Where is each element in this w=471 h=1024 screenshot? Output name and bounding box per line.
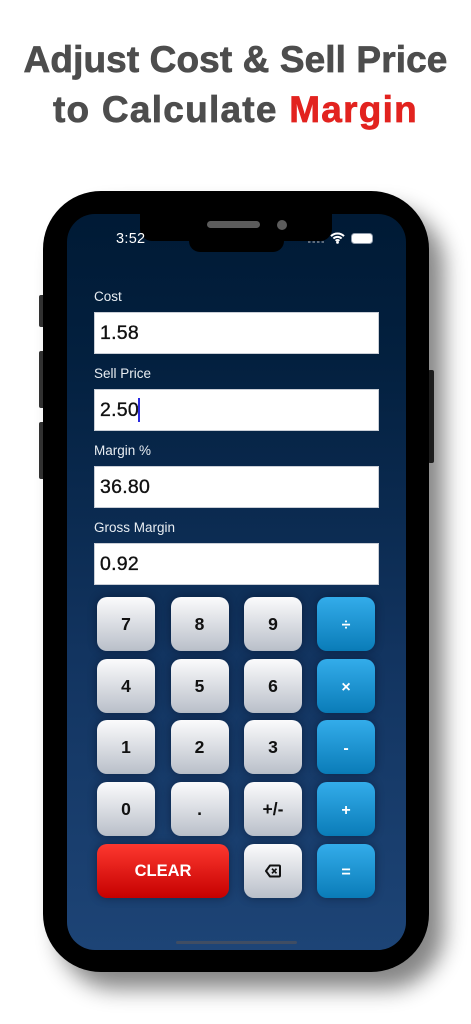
camera [277,220,287,230]
key clear [97,844,229,898]
label: gross margin: Gross Margin [94,520,175,535]
key 0: 0 [121,799,131,819]
key divide [317,597,375,651]
side button: mute [39,295,45,327]
key 7: 7 [121,614,131,634]
side button: volume down [39,422,45,479]
home indicator [176,941,297,944]
key plus [317,782,375,836]
key 7 [97,597,155,651]
key 4: 4 [121,676,131,696]
field: sell price: 2.50 [100,399,139,421]
status bar: time: 3:52 [116,231,145,247]
key 3: 3 [268,737,278,757]
key decimal: . [197,799,202,819]
key multiply: × [341,679,351,696]
phone screen [67,214,406,950]
key plus: + [341,802,351,819]
field: sell price [94,389,379,431]
key 1: 1 [121,737,131,757]
notch lower lip [189,231,284,252]
field: margin percent [94,466,379,508]
key 2 [170,720,228,774]
phone mockup [43,191,429,972]
icon: battery [351,233,373,244]
key equals: = [341,864,351,881]
key decimal [170,782,228,836]
key 8: 8 [195,614,204,634]
key 5: 5 [195,676,204,696]
status bar: signal dots [308,241,325,243]
side button: power [428,370,434,463]
label: sell price: Sell Price [94,366,151,381]
label: margin percent: Margin % [94,443,151,458]
key 2: 2 [195,737,204,757]
key equals [317,844,375,898]
icon: wifi [330,232,345,244]
key plus minus [244,782,302,836]
key backspace [244,844,302,898]
field: gross margin: 0.92 [100,553,139,575]
key 4 [97,659,155,713]
key minus [317,720,375,774]
keypad [94,594,378,902]
key clear: CLEAR [135,862,191,880]
key multiply [317,659,375,713]
key minus: - [343,740,349,757]
field: margin percent: 36.80 [100,476,150,498]
key 3 [244,720,302,774]
side button: volume up [39,351,45,408]
key 6: 6 [268,676,278,696]
key 5 [170,659,228,713]
text cursor [138,398,140,422]
key 6 [244,659,302,713]
speaker [207,221,260,228]
key 1 [97,720,155,774]
field: gross margin [94,543,379,585]
key plus minus: +/- [263,799,283,819]
title: line two: to Calculate Margin [53,89,418,130]
key 9: 9 [268,614,278,634]
icon: backspace [265,864,281,878]
label: cost: Cost [94,289,122,304]
field: cost [94,312,379,354]
notch [140,214,332,241]
title: line one: Adjust Cost & Sell Price [24,39,447,80]
key 8 [170,597,228,651]
field: cost: 1.58 [100,322,139,344]
key 0 [97,782,155,836]
key 9 [244,597,302,651]
key divide: ÷ [342,617,350,634]
